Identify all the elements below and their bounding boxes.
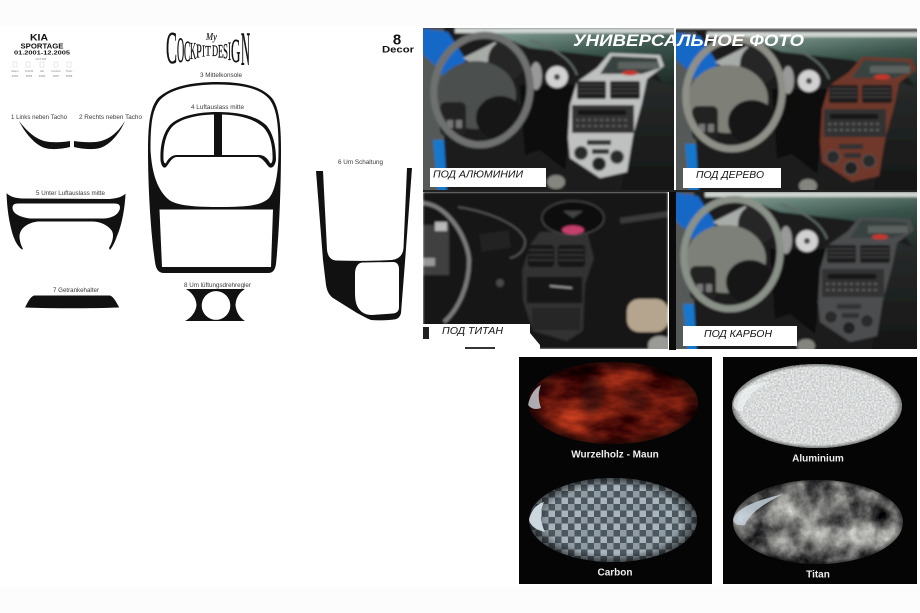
part 8: Um lüftungsdrehregler (184, 282, 251, 321)
part 6: Um Schaltung (316, 159, 412, 320)
decor count: 8 Decor: Decor (382, 44, 414, 56)
header: vehicle model: SPORTAGE (20, 42, 64, 50)
part 3: Mittelkonsole (148, 72, 281, 273)
part 2: Rechts neben Tacho: 2 Rechts neben Tacho (79, 114, 143, 121)
legend: decor article numbers: Titan (66, 69, 73, 73)
logo: My Cockpit Design: I (228, 39, 231, 67)
gap strips between photos (423, 190, 917, 350)
logo: My Cockpit Design: T (205, 43, 211, 59)
legend: decor article numbers: 3657 (53, 74, 60, 78)
swatch: Carbon: Carbon (598, 568, 632, 578)
label: wood (683, 168, 781, 188)
label: carbon: ПОД КАРБОН (704, 329, 773, 340)
label: carbon (683, 326, 797, 346)
legend: decor article numbers: Maun (11, 69, 19, 73)
logo: My Cockpit Design: C (184, 34, 190, 68)
legend: decor article numbers: Ku/FR (25, 69, 34, 73)
header: vehicle model: 01.2001-12.2005 (14, 50, 71, 56)
part 1: Links neben Tacho: 1 Links neben Tacho (11, 114, 68, 121)
legend: decor article numbers: Carbon (51, 69, 61, 73)
logo: My Cockpit Design: I (202, 42, 205, 60)
header: vehicle model: AKT.NR (36, 57, 47, 61)
legend: decor article numbers: 3655 (26, 74, 33, 78)
label: wood: ПОД ДЕРЕВО (696, 170, 764, 181)
part 6: Um Schaltung: 6 Um Schaltung (338, 159, 384, 166)
part 8: Um lüftungsdrehregler: 8 Um lüftungsdrehregler (184, 282, 251, 289)
swatch: Aluminium (730, 362, 904, 464)
label: aluminium: ПОД АЛЮМИНИИ (433, 170, 524, 180)
decor count: 8 Decor (382, 32, 414, 56)
logo: My Cockpit Design (166, 23, 250, 76)
legend: decor article numbers: Alu (40, 69, 44, 73)
banner: universal photo: УНИВЕРСАЛЬНОЕ ФОТО (573, 31, 804, 50)
logo: My Cockpit Design: S (223, 39, 228, 64)
logo: My Cockpit Design: G (231, 32, 240, 70)
logo: My Cockpit Design: My (205, 32, 218, 43)
photo: aluminium trim (420, 25, 682, 197)
swatch: Wurzelholz - Maun: Wurzelholz - Maun (571, 450, 659, 460)
swatch: Titan: Titan (806, 570, 830, 580)
decor count: 8 Decor: 8 (393, 32, 401, 48)
swatch: Aluminium: Aluminium (792, 454, 844, 464)
header: vehicle model: KIA (30, 32, 48, 44)
label: aluminium (430, 168, 546, 187)
swatch: Wurzelholz - Maun (528, 362, 698, 458)
logo: My Cockpit Design: P (196, 41, 202, 63)
part 3: Mittelkonsole: 3 Mittelkonsole (200, 72, 243, 79)
legend: decor article numbers: 3656 (39, 74, 46, 78)
logo: My Cockpit Design: D (212, 42, 218, 60)
legend: decor article numbers (11, 62, 73, 78)
legend: decor article numbers: 3654 (12, 74, 19, 78)
header: vehicle model (14, 32, 71, 61)
logo: My Cockpit Design: K (190, 38, 196, 64)
part 4: Luftauslass mitte (160, 104, 276, 168)
panel: wood and carbon swatches (519, 357, 712, 584)
logo: My Cockpit Design: C (166, 24, 177, 74)
part 5: Unter Luftauslass mitte: 5 Unter Luftauslass mitte (36, 190, 106, 197)
swatch: Titan (731, 478, 905, 580)
part 7: Getrankehalter: 7 Getrankehalter (53, 287, 99, 294)
part 7: Getrankehalter (25, 287, 119, 308)
photo: wood trim (672, 29, 920, 201)
photo: carbon trim (676, 192, 917, 349)
photo: titan trim (423, 192, 672, 354)
part 5: Unter Luftauslass mitte (6, 190, 126, 250)
logo: My Cockpit Design: O (177, 29, 184, 70)
swatch: Carbon (529, 478, 697, 576)
part 2: Rechts neben Tacho (74, 114, 143, 149)
logo: My Cockpit Design: E (218, 42, 223, 63)
label: titan: ПОД ТИТАН (442, 326, 504, 337)
label: titan (423, 324, 540, 349)
logo: My Cockpit Design: N (241, 23, 250, 76)
panel: aluminium and titan swatches (723, 357, 917, 584)
part 1: Links neben Tacho (11, 114, 70, 149)
legend: decor article numbers: 3658 (66, 74, 73, 78)
part 4: Luftauslass mitte: 4 Luftauslass mitte (191, 104, 245, 111)
